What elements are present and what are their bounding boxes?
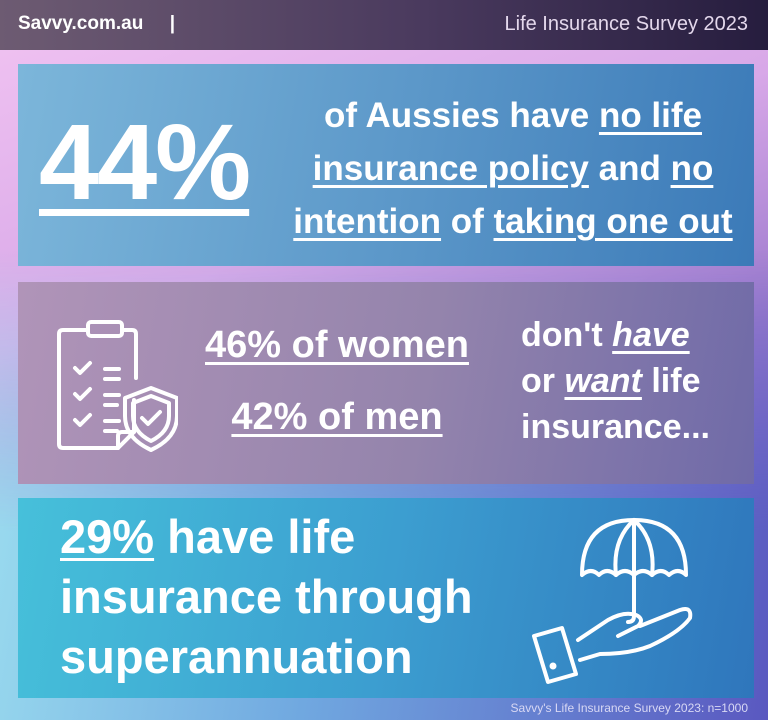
statement: don't have — [521, 316, 690, 354]
site name: Savvy.com.au | — [18, 13, 175, 34]
icon: umbrella over hand — [532, 518, 692, 684]
statement — [293, 96, 733, 241]
statement: of Aussies have no life — [324, 96, 702, 135]
big stat: 44% — [39, 101, 249, 222]
statement — [521, 316, 710, 446]
icon: clipboard with shield — [57, 320, 178, 452]
statement: intention of taking one out — [293, 202, 733, 241]
panel: 44% — [18, 64, 754, 266]
statement: or want life — [521, 362, 700, 400]
statement: 29% have life — [60, 510, 355, 563]
statement: insurance through — [60, 570, 473, 623]
women stat: 46% of women — [205, 324, 469, 366]
survey title: Life Insurance Survey 2023 — [504, 13, 748, 35]
panel: superannuation — [18, 498, 754, 698]
statement: superannuation — [60, 630, 413, 683]
statement — [60, 510, 473, 683]
statement: insurance... — [521, 408, 710, 446]
footer source: Savvy's Life Insurance Survey 2023: n=1000 — [511, 701, 748, 715]
men stat: 42% of men — [231, 396, 443, 438]
header bar — [0, 0, 768, 50]
panel: gender split — [18, 282, 754, 484]
statement: insurance policy and no — [313, 149, 713, 188]
